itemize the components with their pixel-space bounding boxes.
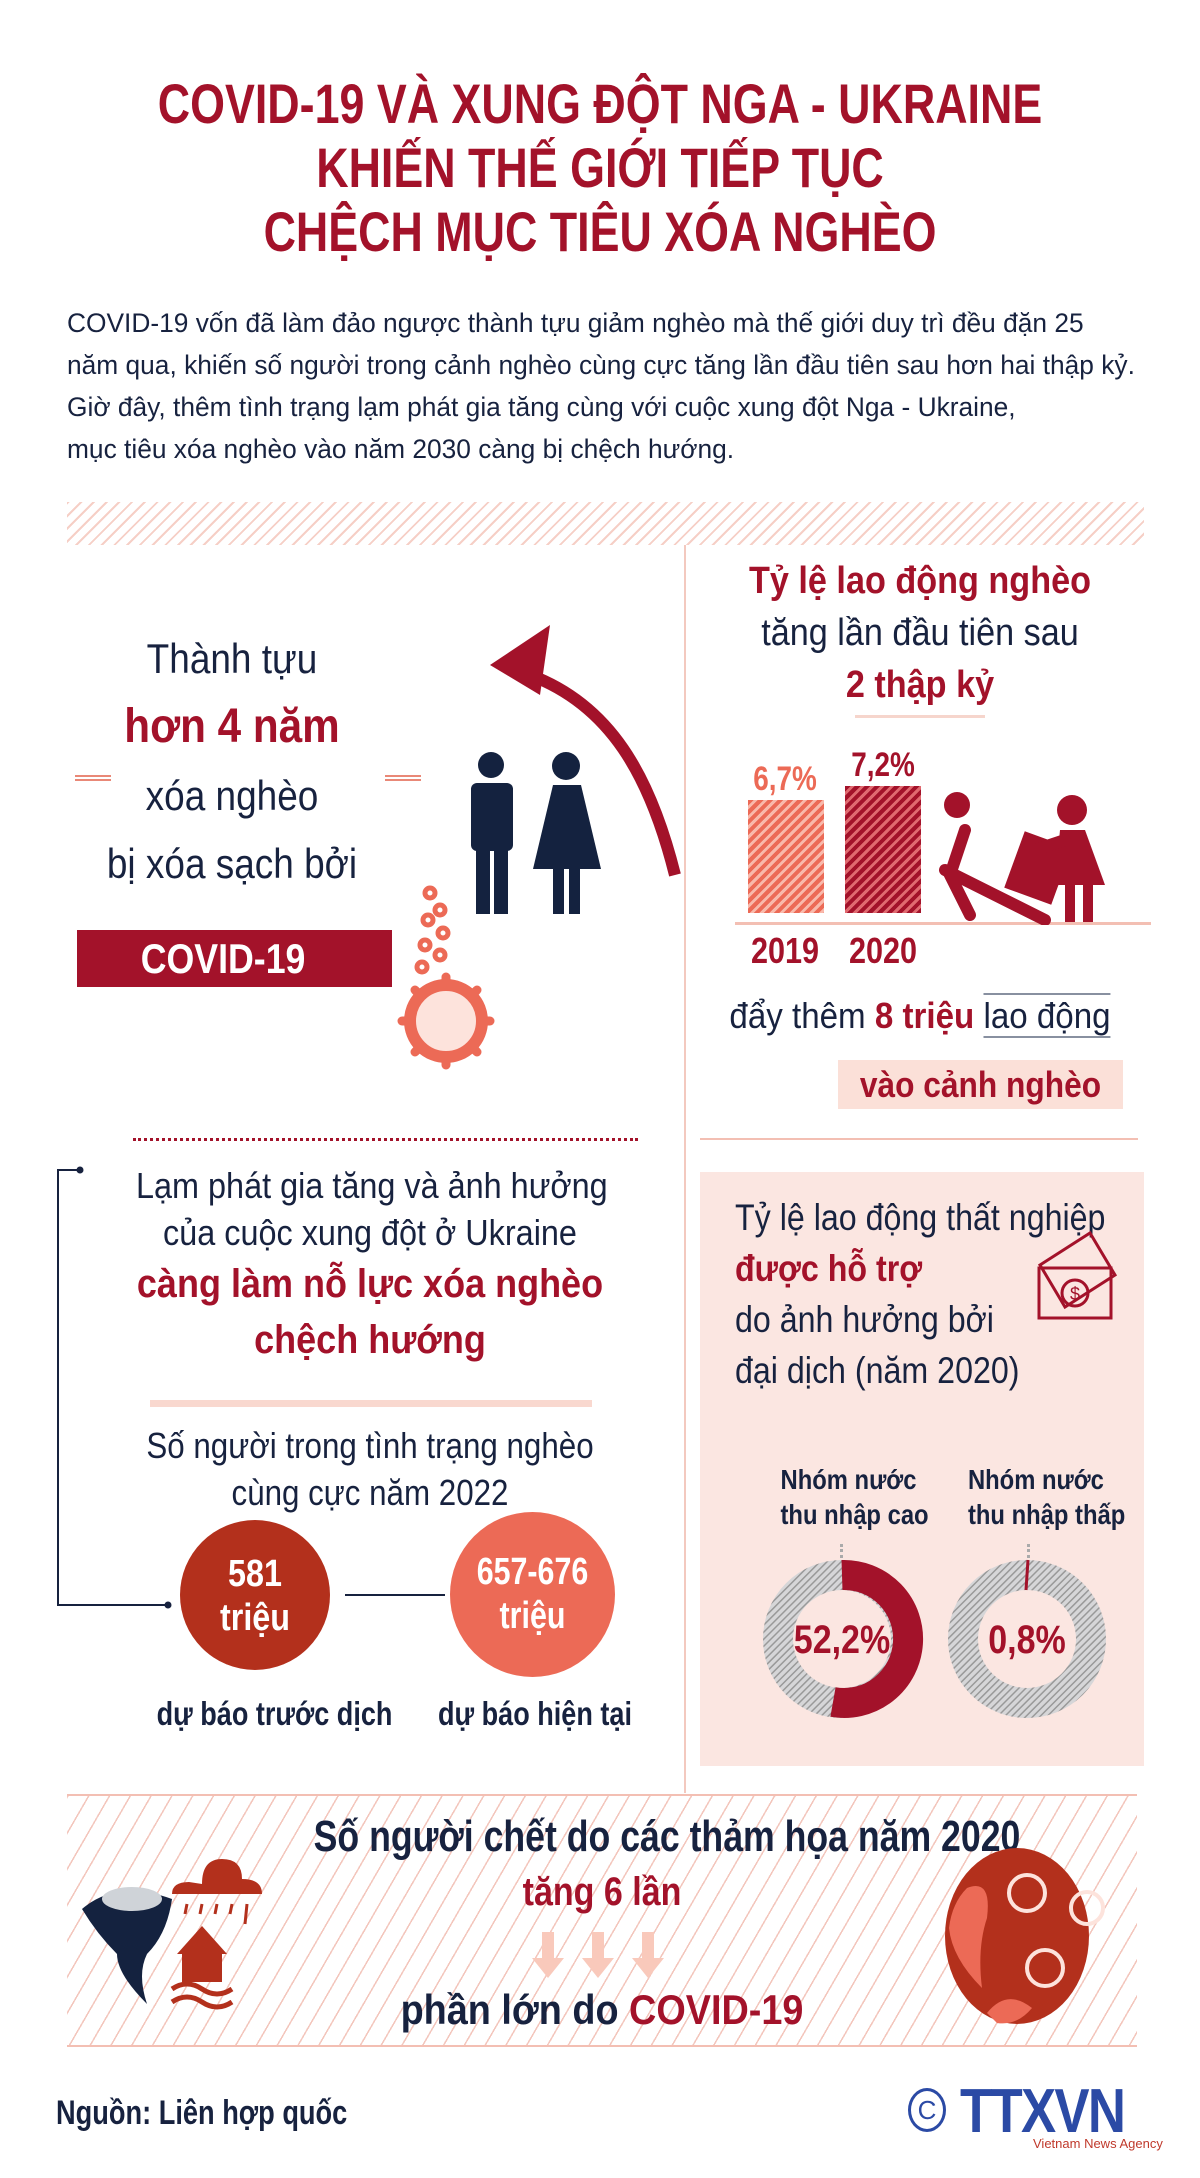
- text: Tỷ lệ lao động thất nghiệp: [735, 1197, 1105, 1238]
- bar chart: 6,7%: [753, 760, 817, 798]
- icon: workers pushing cart: [939, 792, 1105, 925]
- title: KHIẾN THẾ GIỚI TIẾP TỤC: [316, 136, 884, 199]
- labels: groups: thu nhập cao: [780, 1499, 929, 1530]
- panel: inflation and extreme poverty: dự báo hiện tại: [438, 1695, 632, 1732]
- circle: 581 million: [180, 1520, 330, 1670]
- text: achievements: Thành tựu: [147, 635, 317, 682]
- text: 8 million workers: đẩy thêm 8 triệu lao động: [729, 995, 1111, 1036]
- text: extreme poverty 2022: [146, 1425, 594, 1513]
- logo: TTXVN: Vietnam News Agency: [1033, 2136, 1163, 2151]
- callout: into poverty: vào cảnh nghèo: [860, 1064, 1101, 1105]
- logo: TTXVN: C: [918, 2095, 936, 2125]
- panel: disaster deaths: [67, 1794, 1137, 2047]
- circle: 657-676 million: 657-676: [477, 1551, 588, 1593]
- footer: source: Nguồn: Liên hợp quốc: [56, 2094, 347, 2132]
- panel: inflation and extreme poverty: [57, 1165, 632, 1732]
- heading: 2 thập kỷ: [846, 664, 994, 706]
- banner: COVID-19: [77, 930, 392, 987]
- text: mostly covid: phần lớn do COVID-19: [401, 1986, 803, 2033]
- circle: 657-676 million: triệu: [500, 1595, 565, 1637]
- text: extreme poverty 2022: Số người trong tình trạng nghèo: [146, 1425, 594, 1466]
- text: inflation: càng làm nỗ lực xóa nghèo: [137, 1262, 603, 1306]
- icon: people: [471, 752, 601, 914]
- labels: forecasts: dự báo trước dịch: [157, 1695, 392, 1732]
- bar chart: [735, 746, 1151, 971]
- panel: covid wiped out achievements: [75, 625, 681, 1070]
- intro paragraph: [67, 308, 1135, 464]
- text: được hỗ trợ: [735, 1248, 922, 1289]
- labels: groups: [780, 1464, 929, 1530]
- title: CHỆCH MỤC TIÊU XÓA NGHÈO: [264, 200, 936, 263]
- heading: Tỷ lệ lao động nghèo: [749, 560, 1091, 602]
- logo: TTXVN: TTXVN: [960, 2077, 1124, 2146]
- title: [158, 72, 1042, 263]
- panel: unemployed supported: [700, 1172, 1144, 1766]
- text: do ảnh hưởng bởi: [735, 1299, 994, 1340]
- heading: [749, 560, 1091, 706]
- circle: 581 million: triệu: [220, 1597, 290, 1639]
- banner: COVID-19: COVID-19: [141, 935, 305, 982]
- text: deaths heading: Số người chết do các thảm họa năm 2020: [314, 1812, 1020, 1861]
- intro paragraph: COVID-19 vốn đã làm đảo ngược thành tựu giảm nghèo mà thế giới duy trì đều đặn 25: [67, 308, 1084, 338]
- bar chart: 2019: [751, 930, 819, 971]
- text: đại dịch (năm 2020): [735, 1350, 1020, 1391]
- panel: working poverty rate: [729, 560, 1151, 1109]
- text: inflation: Lạm phát gia tăng và ảnh hưởng: [136, 1165, 608, 1206]
- labels: groups: Nhóm nước: [780, 1464, 916, 1495]
- bar chart: 7,2%: [851, 746, 915, 784]
- text: 6 times: tăng 6 lần: [523, 1870, 681, 1914]
- logo: TTXVN: [908, 2077, 1163, 2151]
- circle: 581 million: 581: [228, 1553, 282, 1595]
- icon: money: [1038, 1231, 1117, 1320]
- icon: storm and flood: [82, 1859, 262, 2010]
- panel: unemployed supported: Nhóm nước: [968, 1464, 1104, 1495]
- intro paragraph: năm qua, khiến số người trong cảnh nghèo cùng cực tăng lần đầu tiên sau hơn hai thập kỷ.: [67, 350, 1135, 380]
- panel: unemployed supported: thu nhập thấp: [968, 1499, 1125, 1530]
- chart: donuts: [763, 1560, 1106, 1718]
- icon: virus: [398, 886, 494, 1070]
- arrows: down: [532, 1932, 664, 1978]
- text: inflation: của cuộc xung đột ở Ukraine: [163, 1212, 577, 1253]
- title: COVID-19 VÀ XUNG ĐỘT NGA - UKRAINE: [158, 72, 1042, 135]
- chart: donuts: 52,2%: [794, 1616, 890, 1662]
- text: achievements: [107, 635, 357, 887]
- chart: donuts: 0,8%: [988, 1616, 1066, 1662]
- arrow: curved red: [490, 625, 681, 876]
- icon: globe with viruses: [945, 1848, 1105, 2024]
- text: extreme poverty 2022: cùng cực năm 2022: [232, 1472, 508, 1513]
- icon: money: $: [1070, 1284, 1080, 1304]
- circle: 657-676 million: [450, 1512, 615, 1677]
- text: achievements: bị xóa sạch bởi: [107, 840, 357, 887]
- heading: tăng lần đầu tiên sau: [761, 612, 1079, 654]
- intro paragraph: Giờ đây, thêm tình trạng lạm phát gia tăng cùng với cuộc xung đột Nga - Ukraine,: [67, 392, 1016, 422]
- connector line: [57, 1166, 172, 1608]
- bar chart: 2020: [849, 930, 917, 971]
- text: inflation: [136, 1165, 608, 1362]
- text: [735, 1197, 1105, 1391]
- text: achievements: xóa nghèo: [146, 772, 318, 819]
- text: inflation: chệch hướng: [254, 1318, 486, 1362]
- intro paragraph: mục tiêu xóa nghèo vào năm 2030 càng bị chệch hướng.: [67, 434, 734, 464]
- text: achievements: hơn 4 năm: [124, 700, 340, 753]
